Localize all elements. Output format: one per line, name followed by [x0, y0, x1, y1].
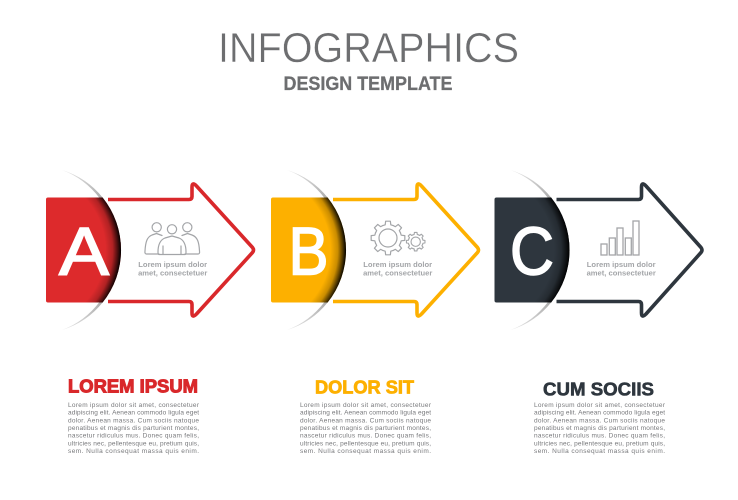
letter block [271, 198, 346, 302]
text block: Lorem Ipsum [68, 376, 201, 455]
paragraph: dolor. Aenean massa. Cum sociis natoque [300, 417, 431, 424]
paragraph: nascetur ridiculus mus. Donec quam felis, [300, 433, 431, 440]
heading: LOREM IPSUM [68, 376, 198, 396]
curved edge highlight [287, 170, 328, 330]
paragraph: sem. Nulla consequat massa quis enim. [68, 448, 199, 455]
paragraph: sem. Nulla consequat massa quis enim. [534, 448, 665, 455]
paragraph: adipiscing elit. Aenean commodo ligula eget [300, 410, 431, 417]
icon: people [145, 223, 200, 254]
icon: gears [371, 221, 425, 255]
panel: step A arrow [46, 170, 254, 330]
paragraph: adipiscing elit. Aenean commodo ligula eget [534, 410, 665, 417]
block shadow [271, 198, 346, 302]
paragraph: ultricies nec, pellentesque eu, pretium quis, [300, 440, 431, 447]
paragraph: Lorem ipsum dolor sit amet, consectetuer [534, 402, 666, 409]
text block: Dolor Sit [300, 378, 433, 455]
panel: step C arrow [494, 170, 702, 330]
block shadow [46, 198, 121, 302]
paragraph: ultricies nec, pellentesque eu, pretium quis, [534, 440, 665, 447]
curved edge highlight [510, 170, 552, 330]
panel: step B arrow [271, 170, 478, 330]
heading: CUM SOCIIS [543, 380, 654, 400]
paragraph: Lorem ipsum dolor sit amet, consectetuer [68, 402, 200, 409]
title: INFOGRAPHICS [218, 24, 519, 71]
letter B: B [288, 214, 328, 290]
caption: amet, consectetuer [587, 268, 656, 278]
arrow outline [333, 184, 478, 316]
paragraph: ultricies nec, pellentesque eu, pretium quis, [68, 440, 199, 447]
paragraph: nascetur ridiculus mus. Donec quam felis, [534, 433, 665, 440]
paragraph: dolor. Aenean massa. Cum sociis natoque [534, 417, 665, 424]
subtitle: DESIGN TEMPLATE [284, 74, 452, 95]
curved edge highlight [62, 170, 103, 330]
caption: Lorem ipsum dolor [587, 260, 656, 269]
text block: Cum Sociis [534, 380, 667, 455]
letter block [494, 198, 570, 302]
letter block [46, 198, 121, 302]
caption: amet, consectetuer [138, 268, 207, 278]
paragraph: nascetur ridiculus mus. Donec quam felis, [68, 433, 199, 440]
letter C: C [510, 214, 554, 290]
block shadow [494, 198, 570, 302]
paragraph: penatibus et magnis dis parturient montes, [300, 425, 431, 432]
paragraph: penatibus et magnis dis parturient montes, [68, 425, 199, 432]
letter A: A [59, 214, 110, 290]
paragraph: penatibus et magnis dis parturient montes, [534, 425, 665, 432]
paragraph: dolor. Aenean massa. Cum sociis natoque [68, 417, 199, 424]
arrow outline [108, 184, 254, 316]
paragraph: Lorem ipsum dolor sit amet, consectetuer [300, 402, 432, 409]
heading: DOLOR SIT [315, 378, 414, 398]
paragraph: adipiscing elit. Aenean commodo ligula eget [68, 410, 199, 417]
caption: amet, consectetuer [363, 268, 432, 278]
caption: Lorem ipsum dolor [138, 260, 207, 269]
icon: bar chart [601, 221, 639, 255]
arrow outline [556, 184, 702, 316]
paragraph: sem. Nulla consequat massa quis enim. [300, 448, 431, 455]
caption: Lorem ipsum dolor [363, 260, 432, 269]
